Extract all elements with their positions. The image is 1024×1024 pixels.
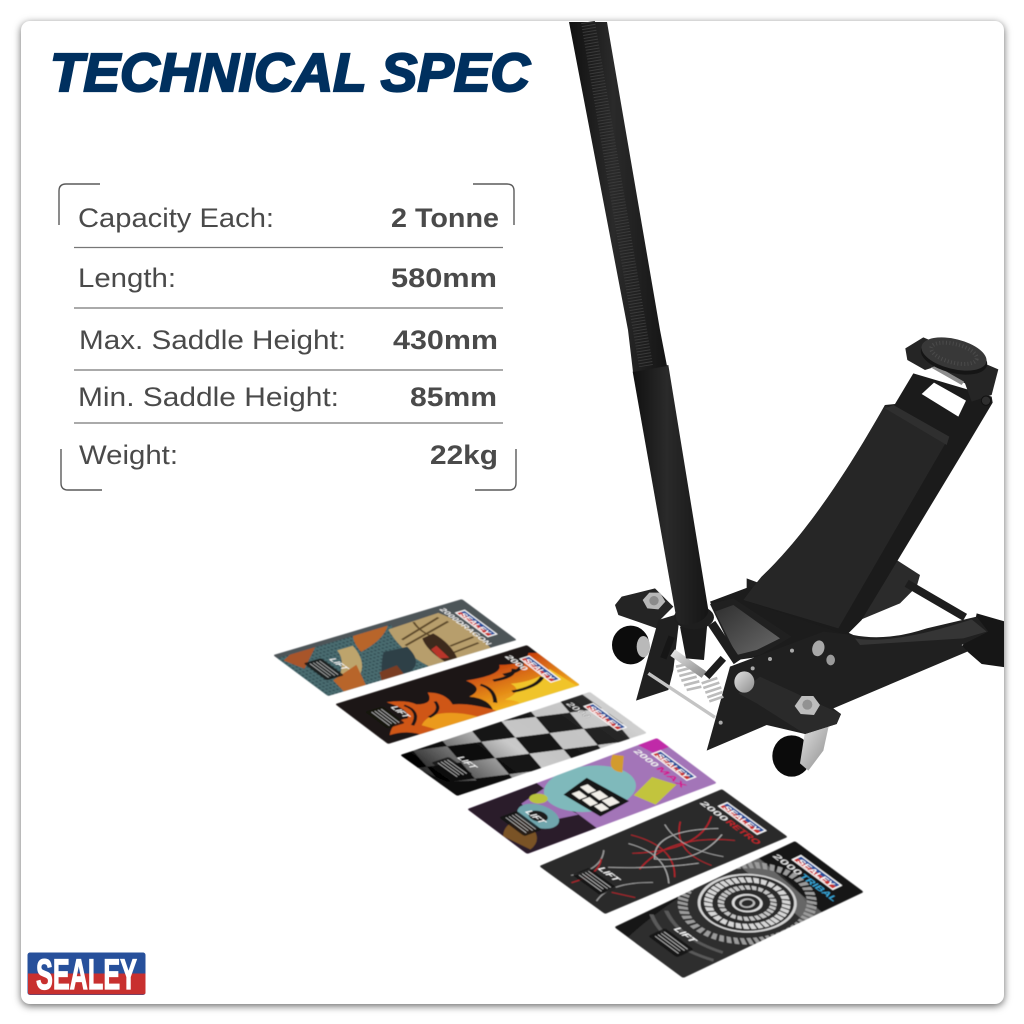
sticker card: chequered flag: 2000: [564, 701, 594, 719]
jack: pedal highlight: [855, 619, 987, 645]
jack: front left wheel: [612, 626, 650, 664]
row: capacity: Capacity Each:: [78, 203, 274, 233]
title: TECHNICAL SPEC: [50, 43, 531, 103]
trolley jack illustration: [569, 22, 1005, 777]
sticker card: flames: 2000: [502, 654, 531, 672]
jack: side frame: [707, 617, 988, 751]
logo: SEALEY: [28, 951, 146, 999]
jack: handle lower section: [633, 365, 708, 625]
row: weight: 22kg: [430, 440, 498, 470]
row: max saddle height: 430mm: [393, 325, 498, 355]
sticker card: tribal: TRIBAL: [796, 873, 840, 903]
sticker card: dragon: 2000DRAGON: [437, 607, 494, 646]
row: capacity: 2 Tonne: [391, 203, 499, 233]
row: min saddle height: [78, 382, 497, 412]
row: length: [78, 263, 497, 293]
jack: lifting arm: [743, 373, 993, 635]
jack: rear wheel: [962, 613, 1005, 667]
jack: front wheel and caster: [772, 723, 829, 777]
sticker card: monster: MAX: [654, 766, 690, 789]
jack: front bracket plate: [738, 677, 841, 734]
sticker card: monster: 2000: [631, 748, 661, 768]
panel: specification table: [59, 184, 516, 490]
jack: handle upper section: [569, 22, 667, 372]
row: length: Length:: [78, 263, 176, 293]
sticker card: retro pinstripe: [539, 789, 788, 914]
sticker card: tribal: 2000: [770, 853, 805, 877]
table corner brackets: [59, 184, 516, 490]
sticker card: tribal: [607, 835, 867, 981]
sticker card: chequered flag: [400, 692, 647, 796]
sticker card: flames: [335, 645, 580, 744]
sticker card: retro pinstripe: RETRO: [722, 819, 764, 846]
logo: SEALEY: SEALEY: [36, 951, 137, 999]
jack: left bracket and plate: [615, 588, 680, 701]
row: min saddle height: 85mm: [410, 382, 497, 412]
row: weight: [79, 440, 498, 470]
row: max saddle height: [79, 325, 498, 355]
row: weight: Weight:: [79, 440, 178, 470]
jack: saddle head: [905, 331, 998, 417]
row: max saddle height: Max. Saddle Height:: [79, 325, 346, 355]
row: capacity: [78, 203, 499, 233]
sticker card: retro pinstripe: 2000: [697, 800, 731, 822]
jack: bolts and holes: [643, 593, 835, 725]
jack: release rod and springs: [648, 653, 723, 717]
sticker card: dragon: [273, 599, 517, 696]
jack: rear section and cross rod: [710, 560, 965, 660]
sticker sheets group: [273, 599, 867, 981]
row: length: 580mm: [391, 263, 497, 293]
sticker card: monster: [466, 737, 717, 854]
jack: handle socket and fork: [663, 605, 737, 677]
row: min saddle height: Min. Saddle Height:: [78, 382, 339, 412]
jack: oil tray: [710, 604, 780, 655]
